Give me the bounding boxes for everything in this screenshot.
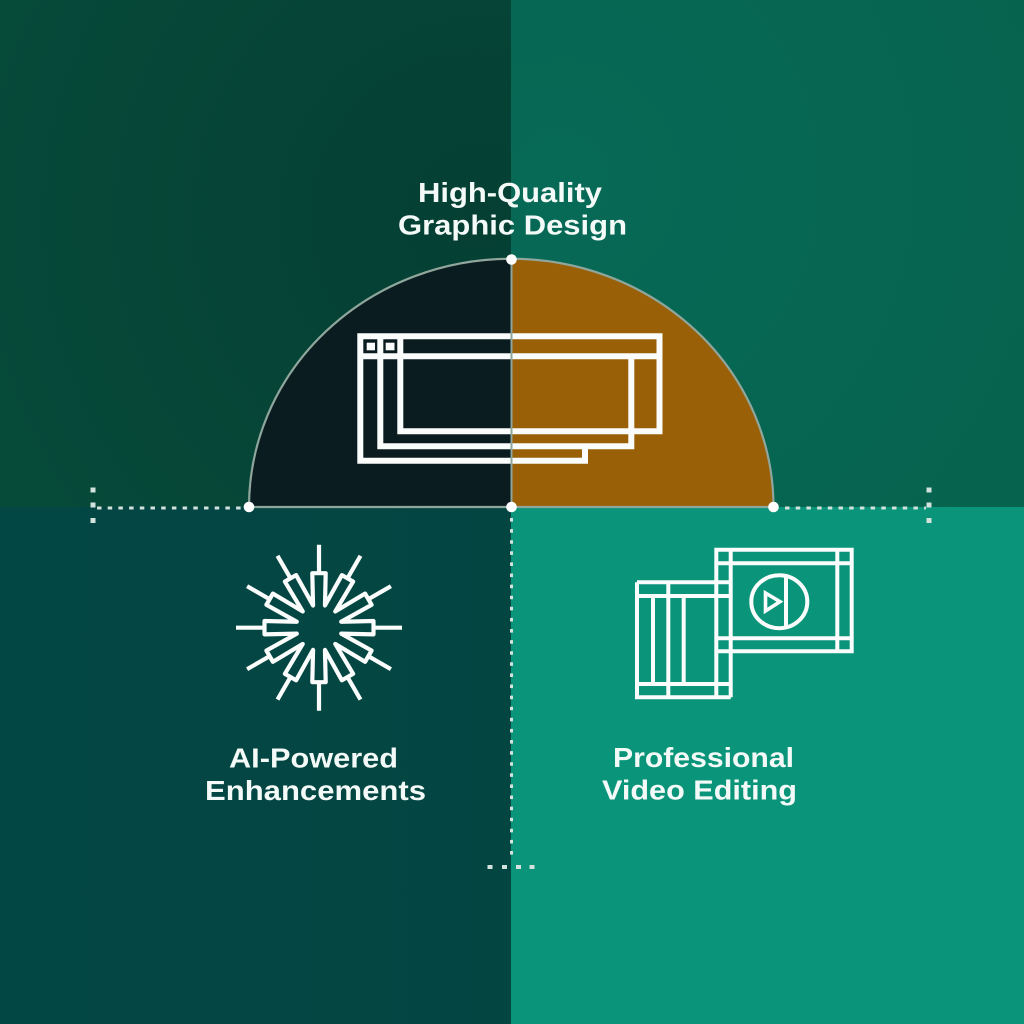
play triangle bbox=[766, 593, 780, 611]
panel: bottom-right background bbox=[511, 507, 1024, 1024]
heading: High-Quality Graphic Design: Graphic Design bbox=[398, 210, 627, 240]
play button circle bbox=[751, 575, 807, 628]
center divider over window icon bbox=[510, 259, 512, 507]
starburst rays bbox=[236, 545, 402, 711]
icon: video film frames bbox=[637, 550, 852, 697]
dome right half bbox=[512, 259, 774, 507]
heading: High-Quality Graphic Design bbox=[398, 177, 627, 240]
icon: AI starburst bbox=[236, 545, 402, 711]
panel: top-right background bbox=[511, 0, 1024, 507]
panel: top-left background bbox=[0, 0, 511, 507]
label: AI-Powered Enhancements bbox=[205, 742, 426, 806]
connector: left dotted line bbox=[90, 488, 242, 523]
window button 1 bbox=[367, 343, 375, 350]
label: AI-Powered Enhancements: AI-Powered bbox=[229, 742, 398, 774]
semicircle: split dome bbox=[249, 259, 774, 507]
heading: High-Quality Graphic Design: High-Quality bbox=[418, 177, 602, 208]
window button 2 bbox=[386, 343, 394, 350]
connector: vertical dotted line bbox=[488, 518, 534, 869]
starburst zigzag ring bbox=[264, 573, 374, 682]
label: Professional Video Editing bbox=[602, 742, 797, 806]
label: AI-Powered Enhancements: Enhancements bbox=[205, 775, 426, 806]
label: Professional Video Editing: Professional bbox=[613, 742, 794, 773]
dome outline bbox=[249, 259, 774, 507]
node dots bbox=[244, 254, 779, 512]
dome left half bbox=[249, 259, 512, 507]
icon: stacked windows bbox=[360, 336, 660, 461]
play button divider bbox=[784, 575, 788, 628]
label: Professional Video Editing: Video Editing bbox=[602, 774, 797, 806]
panel: bottom-left background bbox=[0, 507, 511, 1024]
connector: right dotted line bbox=[785, 488, 932, 523]
